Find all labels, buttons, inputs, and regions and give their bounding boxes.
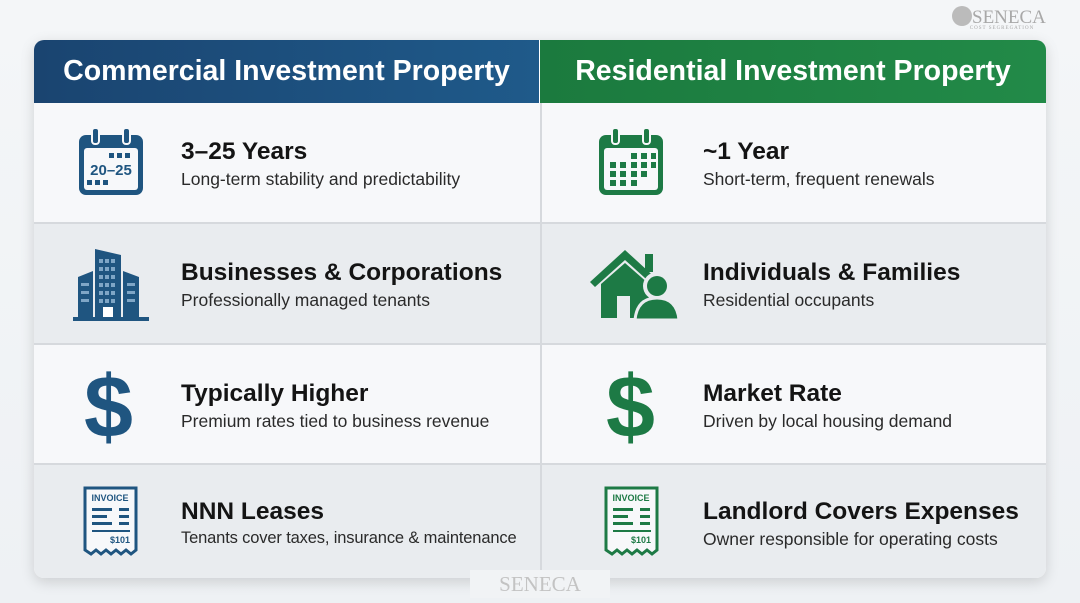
row: tenants: Businesses & Corporations xyxy=(181,259,502,286)
row: expenses: Landlord Covers Expenses xyxy=(703,498,1019,525)
icon: calendar 20-25: 20–25 xyxy=(90,162,132,179)
row: rent: Market Rate xyxy=(703,380,842,407)
icon: dollar blue: $ xyxy=(84,357,133,456)
logo top right: COST SEGREGATION xyxy=(970,26,1034,31)
logo top right xyxy=(952,6,1046,31)
row: lease term: 3–25 Years xyxy=(181,138,307,165)
icon: invoice blue: $101 xyxy=(110,535,130,545)
bottom watermark: SENECA xyxy=(499,572,581,596)
logo top right: SENECA xyxy=(972,7,1046,28)
row: lease term: Short-term, frequent renewals xyxy=(703,169,934,189)
row: lease term: Long-term stability and predictability xyxy=(181,169,460,189)
row: lease term xyxy=(34,103,1046,224)
icon: invoice green xyxy=(604,486,658,556)
row: tenants: Professionally managed tenants xyxy=(181,290,430,310)
icon: calendar 20-25 xyxy=(79,129,143,195)
icon: invoice green: $101 xyxy=(631,535,651,545)
row: expenses xyxy=(34,465,1046,578)
icon: dollar green: $ xyxy=(606,357,655,456)
icon: invoice blue: INVOICE xyxy=(91,493,129,503)
header: residential: Residential Investment Property xyxy=(575,55,1011,87)
row: rent: Typically Higher xyxy=(181,380,368,407)
row: tenants: Individuals & Families xyxy=(703,259,960,286)
bottom watermark xyxy=(470,570,610,598)
icon: calendar green xyxy=(599,129,663,195)
icon: house with person xyxy=(590,250,678,318)
header: commercial xyxy=(34,40,539,103)
header: residential xyxy=(540,40,1046,103)
row: rent xyxy=(34,345,1046,465)
row: expenses: NNN Leases xyxy=(181,498,324,525)
header: commercial: Commercial Investment Property xyxy=(63,55,510,87)
row: expenses: Tenants cover taxes, insurance & maintenance xyxy=(181,529,517,547)
row: tenants xyxy=(34,224,1046,345)
icon: invoice blue xyxy=(84,486,138,556)
icon: office building xyxy=(73,249,149,321)
row: rent: Premium rates tied to business revenue xyxy=(181,411,489,431)
row: rent: Driven by local housing demand xyxy=(703,411,952,431)
icon: invoice green: INVOICE xyxy=(612,493,650,503)
row: tenants: Residential occupants xyxy=(703,290,874,310)
row: lease term: ~1 Year xyxy=(703,138,789,165)
row: expenses: Owner responsible for operating costs xyxy=(703,529,998,549)
